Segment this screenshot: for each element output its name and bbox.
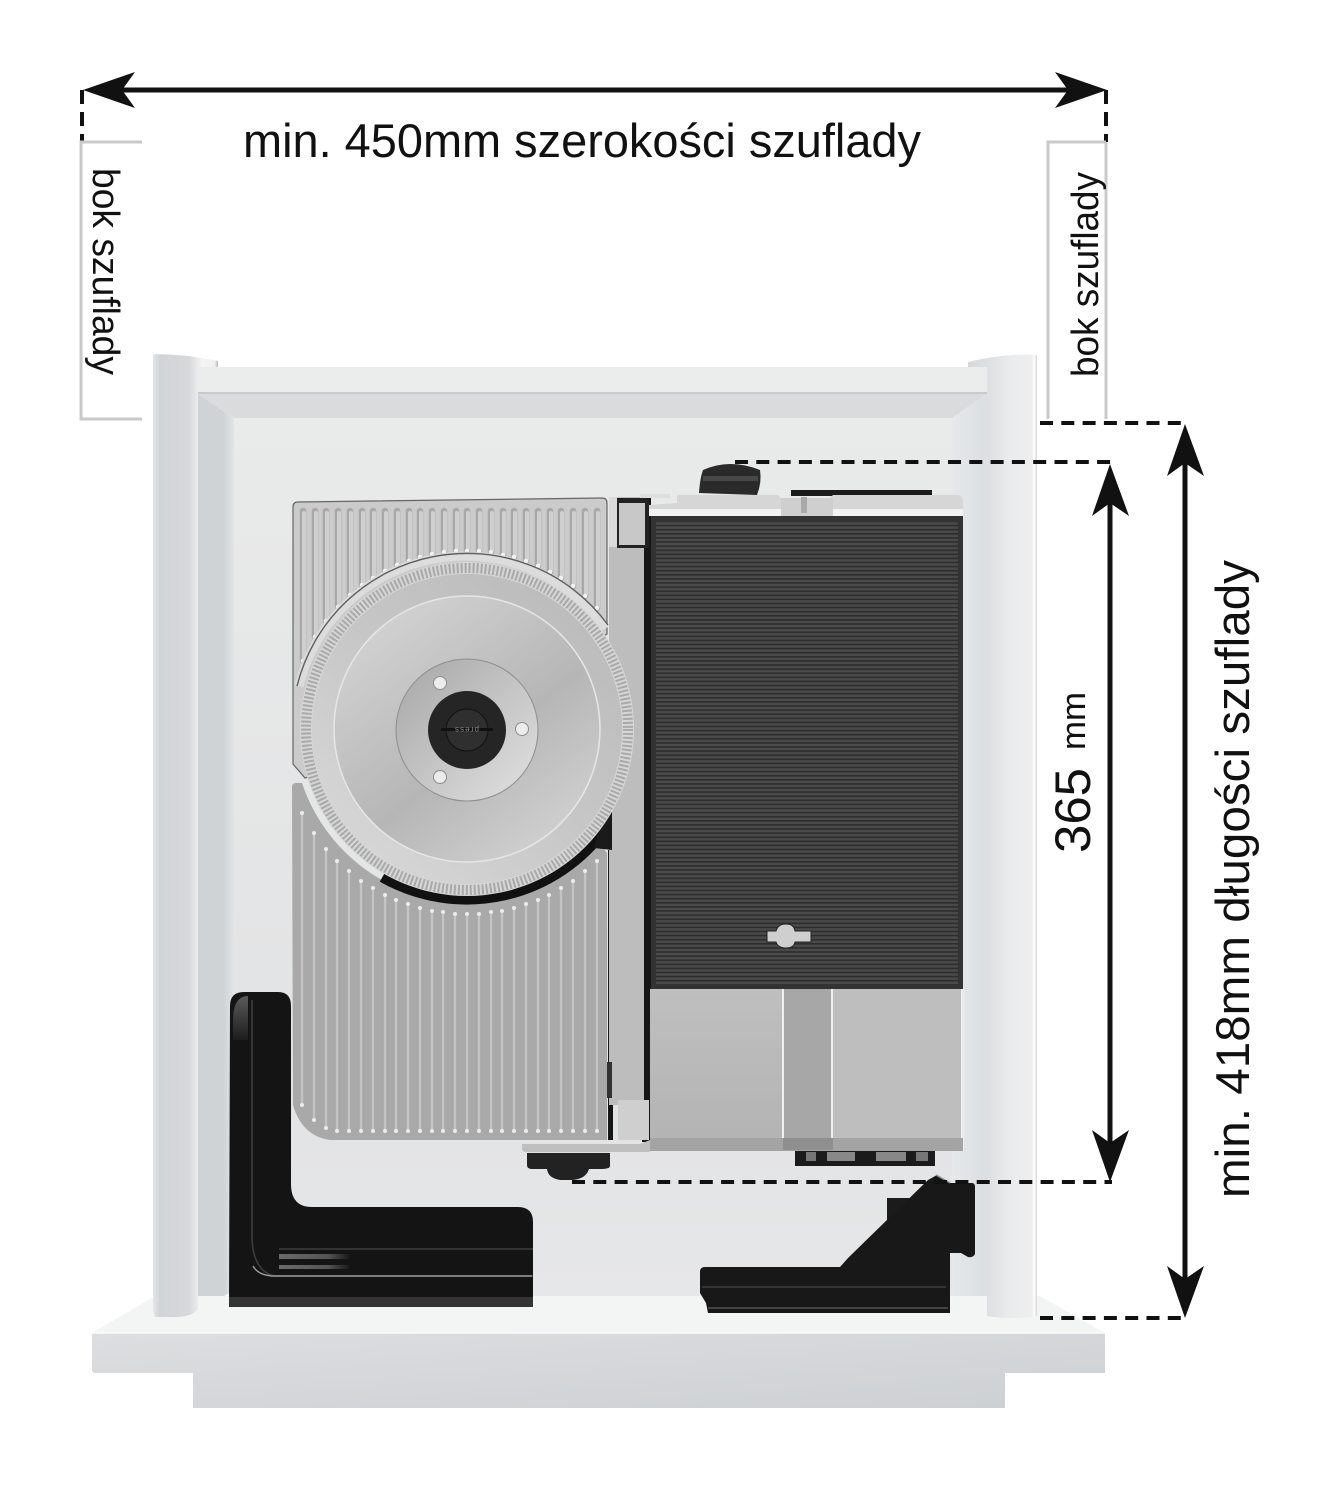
lower housing <box>650 989 964 1151</box>
drawer <box>92 354 1105 1408</box>
blade lock knob <box>428 691 506 769</box>
365 mm arrow <box>1092 464 1129 1182</box>
blade <box>300 562 634 896</box>
carriage top cap <box>649 495 963 516</box>
365 mm label: mm <box>1055 692 1093 750</box>
blade lock knob: press <box>455 725 479 734</box>
hub <box>396 659 538 801</box>
width label: min. 450mm szerokości szuflady <box>243 114 921 167</box>
handle slot <box>767 924 811 948</box>
ribbed dark panel <box>651 516 963 989</box>
centre column <box>603 494 670 1142</box>
right drawer side outline <box>1048 142 1106 419</box>
top rail clip <box>791 490 932 496</box>
bottom plate ridges <box>302 813 597 1131</box>
drawer back wall <box>198 367 987 418</box>
dark gap under blade <box>383 812 612 898</box>
drawer front panel <box>92 1333 1105 1408</box>
365 mm label: 365 <box>1045 768 1101 853</box>
drawer floor <box>233 408 953 1300</box>
left side label: bok szuflady <box>84 168 126 375</box>
slicer <box>292 464 964 1180</box>
drawer front top surface <box>92 1296 1105 1333</box>
bottom knob <box>527 1153 610 1180</box>
top plate grooves <box>303 511 598 661</box>
width arrow <box>83 72 1107 108</box>
right black bracket <box>700 1175 975 1313</box>
top knob <box>699 464 761 495</box>
length dashed guide lines <box>572 423 1186 1318</box>
right rail <box>968 355 1037 1318</box>
418 mm label: min. 418mm długości szuflady <box>1206 559 1259 1198</box>
drawer right inner side <box>952 394 987 1316</box>
top plate <box>293 498 607 778</box>
365 mm label <box>1045 692 1101 853</box>
right side label: bok szuflady <box>1065 172 1107 377</box>
width dashed extension lines <box>82 90 1106 142</box>
hub pins <box>434 676 528 784</box>
left drawer side outline <box>81 142 142 419</box>
left rail <box>153 354 218 1317</box>
418 mm arrow <box>1167 424 1204 1318</box>
left black bracket <box>229 992 533 1307</box>
foot plate <box>522 1140 650 1152</box>
bottom rail clip <box>795 1151 935 1166</box>
drawer left inner side <box>198 394 234 1312</box>
bottom plate <box>292 783 607 1140</box>
blade surround on top plate <box>297 553 608 686</box>
